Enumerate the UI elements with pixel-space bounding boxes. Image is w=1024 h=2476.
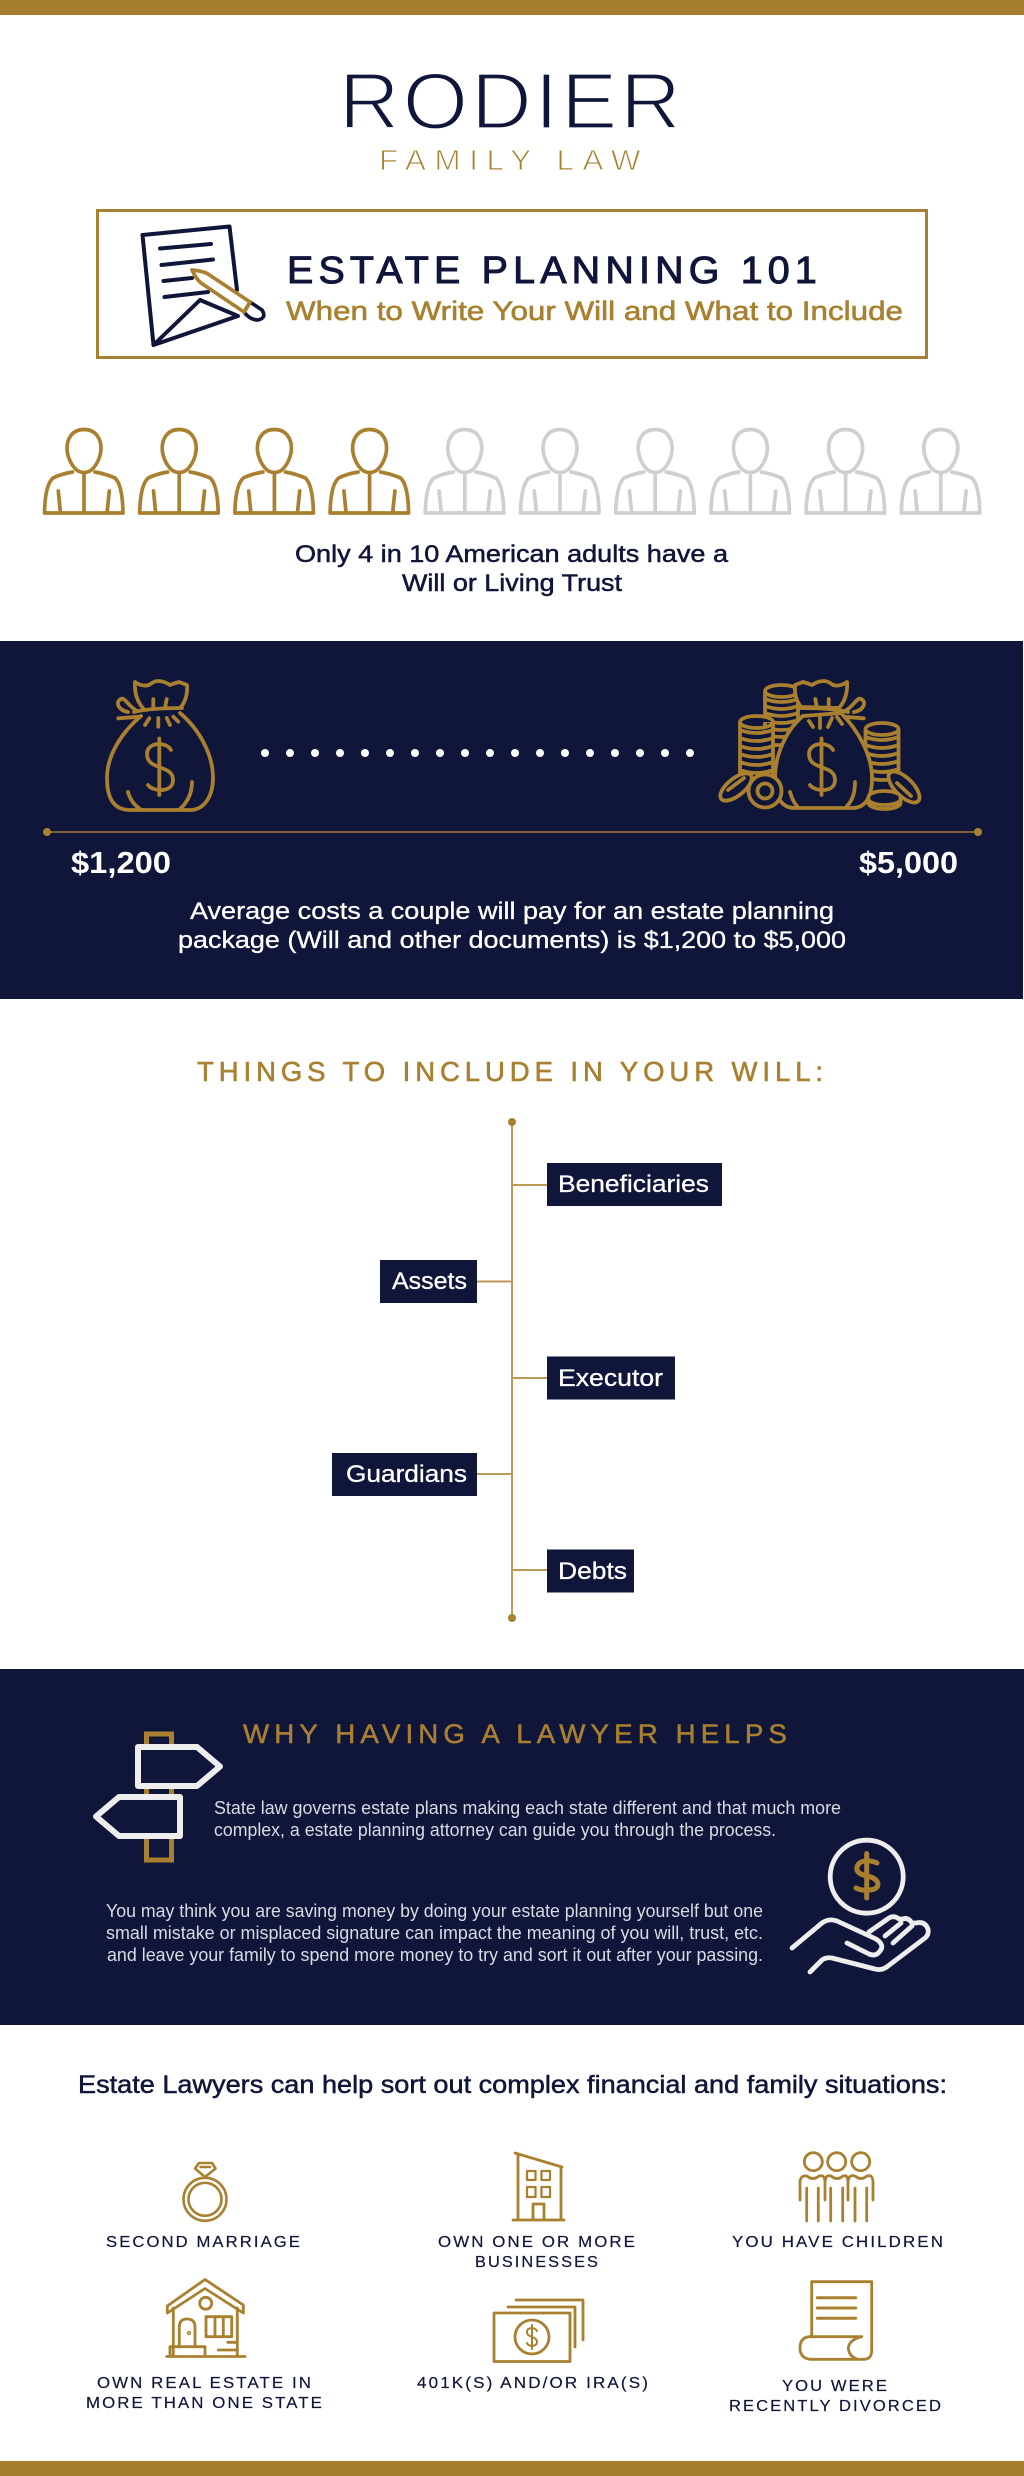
item: Executor: Executor [558,1365,663,1392]
situation: real estate [86,2280,324,2412]
icon: ring [184,2163,226,2221]
icon: money bag with coins [716,681,925,809]
cost range line [43,828,982,836]
bottom bar [0,2461,1024,2476]
paragraph: saving money: small mistake or misplaced signature can impact the meaning of you will, trust, etc. [106,1923,763,1943]
heading: WHY HAVING A LAWYER HELPS [243,1719,792,1749]
icon row: 10 people, 4 highlighted [44,430,980,513]
icon: stack of cash [494,2300,583,2362]
item: Assets [380,1260,477,1303]
subheading: When to Write Your Will and What to Include [286,296,903,326]
situation: businesses: BUSINESSES [475,2254,600,2271]
situation: divorce: RECENTLY DIVORCED [729,2398,943,2415]
item: Beneficiaries: Beneficiaries [558,1171,709,1198]
paragraph: state law [214,1798,841,1840]
dotted connector [261,749,694,757]
icon: signpost [96,1734,220,1860]
icon: person 4 [330,430,409,513]
item: Debts: Debts [558,1558,627,1585]
icon: scroll document [800,2282,872,2359]
item: Debts [547,1550,634,1592]
situation: real estate: OWN REAL ESTATE IN [97,2375,313,2392]
paragraph: saving money [106,1901,763,1965]
item: Guardians [332,1453,477,1496]
icon: person 5 [425,430,504,513]
icon: house [167,2280,245,2356]
icon: hand holding coin [792,1840,928,1972]
statistic text: Will or Living Trust [402,570,622,597]
situation: children: YOU HAVE CHILDREN [732,2234,945,2251]
icon: person 3 [235,430,313,513]
icon: person 2 [140,430,218,513]
situation: real estate: MORE THAN ONE STATE [86,2395,324,2412]
icon: building [513,2153,564,2220]
icon: money bag [107,681,213,810]
paragraph: state law: State law governs estate plans making each state different and that much more [214,1798,841,1818]
icon: person 8 [711,430,789,513]
icon: person 1 [44,430,123,513]
icon: person 10 [901,430,980,513]
logo: Rodier Family Law: RODIER [339,56,684,146]
paragraph: saving money: and leave your family to spend more money to try and sort it out after your passing. [107,1945,763,1965]
icon: document and pencil [142,226,264,345]
situation: divorce: YOU WERE [782,2378,889,2395]
panel: estate planning costs [0,641,1023,999]
icon: person 9 [806,430,885,513]
cost description: package (Will and other documents) is $1,200 to $5,000 [178,927,846,954]
heading: things to include: THINGS TO INCLUDE IN YOUR WILL: [197,1056,828,1087]
item: Beneficiaries [547,1163,722,1206]
title panel [98,210,926,358]
logo: Rodier Family Law: FAMILY LAW [379,145,649,177]
item: Guardians: Guardians [346,1461,467,1488]
situation: retirement accounts [417,2300,650,2392]
paragraph: saving money: You may think you are saving money by doing your estate planning yourself but one [106,1901,763,1921]
situation: businesses: OWN ONE OR MORE [438,2234,637,2251]
top bar [0,0,1024,15]
cost description [178,898,846,954]
heading: Estate Planning 101: ESTATE PLANNING 101 [287,250,822,292]
icon: person 6 [520,430,599,513]
timeline: will contents [332,1118,722,1622]
paragraph: state law: complex, a estate planning attorney can guide you through the process. [214,1820,776,1840]
item: Executor [547,1356,675,1400]
situation: retirement accounts: 401K(S) AND/OR IRA(S) [417,2375,650,2392]
situation: businesses [438,2153,637,2271]
high cost value: $5,000 [859,845,958,880]
panel: why having a lawyer helps [0,1669,1024,2025]
situation: divorce [729,2282,943,2415]
item: Assets: Assets [392,1268,467,1295]
low cost value: $1,200 [71,845,171,880]
cost description: Average costs a couple will pay for an estate planning [190,898,834,925]
situation: second marriage [106,2163,302,2251]
statistic text: Only 4 in 10 American adults have a [295,541,729,568]
situation: children [732,2153,945,2251]
situation: second marriage: SECOND MARRIAGE [106,2234,302,2251]
icon: three children [800,2153,873,2221]
icon: person 7 [616,430,694,513]
statistic text [295,541,729,597]
heading: estate lawyers can help: Estate Lawyers can help sort out complex financial and family situations: [78,2071,947,2099]
